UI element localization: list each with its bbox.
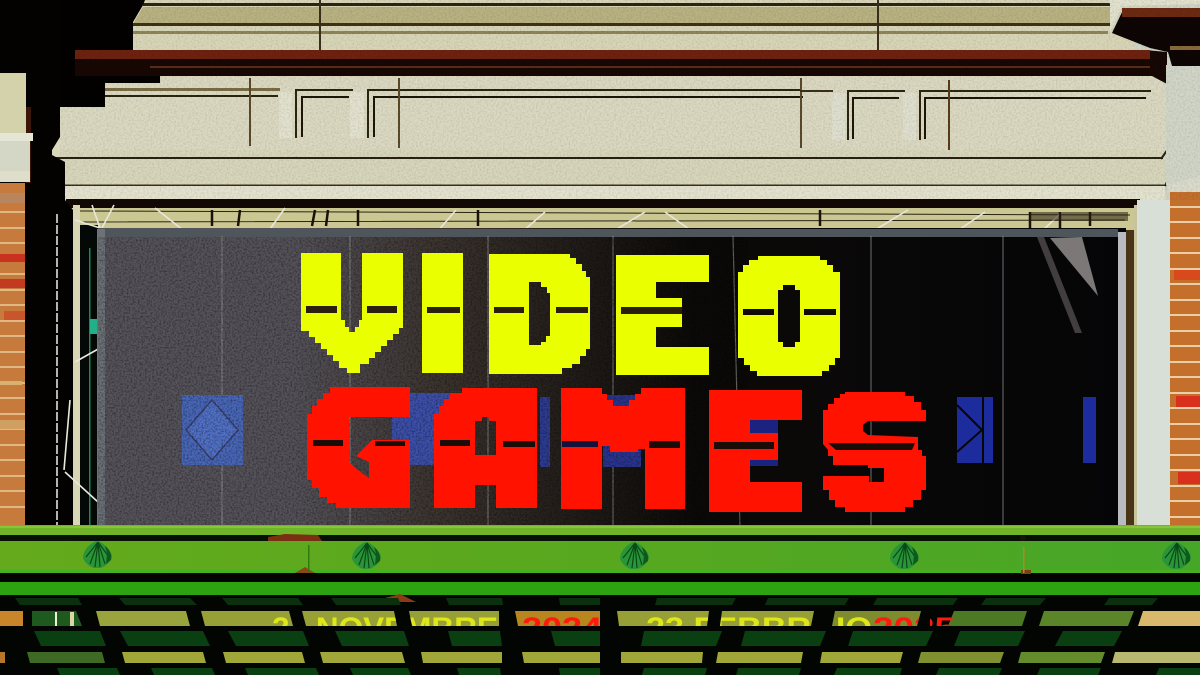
icon: scallop shell 2 — [352, 542, 381, 569]
rust spots — [268, 534, 322, 541]
letter E — [616, 255, 709, 375]
right pier and brick column — [1126, 65, 1200, 527]
lattice: olive slats row 2 — [0, 611, 1200, 626]
lattice: dark green slats row 5 — [57, 668, 1200, 675]
letter M — [561, 388, 685, 509]
icon: scallop shell 3 — [620, 542, 649, 569]
banner — [97, 228, 1126, 527]
icon: scallop shell 1 — [83, 541, 112, 568]
lattice: dark green slats row 3 — [34, 631, 1122, 646]
lattice: dates seen through the canopy: 23 FEBBRAIO — [646, 612, 872, 645]
slits across GAMES letters — [313, 440, 915, 450]
upper entablature band — [133, 0, 1133, 51]
icon: scallop shell 4 — [890, 542, 919, 569]
left window frame with wires — [57, 205, 100, 527]
recess above banner with tension wires — [66, 199, 1140, 236]
green canopy beam — [0, 525, 1200, 675]
banner folds upper right — [1037, 237, 1082, 333]
letter A — [434, 388, 537, 508]
letter I — [422, 253, 463, 373]
letter D — [489, 254, 590, 374]
heading: VIDEO — [301, 253, 840, 376]
left pale pier — [0, 73, 33, 182]
lower frieze moulding — [52, 149, 1200, 200]
heading: GAMES — [307, 387, 926, 512]
lattice: dates seen through the canopy: 2025 — [873, 612, 955, 645]
letter E — [709, 390, 802, 512]
stone grain texture — [60, 0, 1200, 200]
lattice: dates seen through the canopy: 2024 — [522, 612, 602, 645]
letter O — [738, 256, 840, 376]
letter G — [307, 387, 410, 508]
slits across VIDEO letters — [306, 306, 836, 315]
lattice: dates seen through the canopy — [273, 617, 952, 626]
faded blue squares on banner — [182, 393, 1096, 467]
frieze with recessed panels — [60, 76, 1166, 153]
letter S — [823, 392, 926, 512]
lattice: dates seen through the canopy: 24 NOVEMBRE — [272, 612, 498, 645]
icon: scallop shell 5 — [1162, 542, 1191, 569]
banner grain texture — [98, 237, 748, 527]
top-right cornice projection — [1108, 0, 1200, 66]
dark top-left corner shadow and column — [0, 0, 160, 527]
lattice: dark green slats row 1 — [15, 598, 1158, 605]
dark red cornice — [75, 50, 1167, 84]
lattice: olive slats row 4 — [0, 652, 1200, 663]
stone wall background — [0, 0, 1200, 530]
banner seams — [222, 236, 1003, 527]
letter V — [301, 253, 403, 373]
left brick column — [0, 183, 25, 525]
